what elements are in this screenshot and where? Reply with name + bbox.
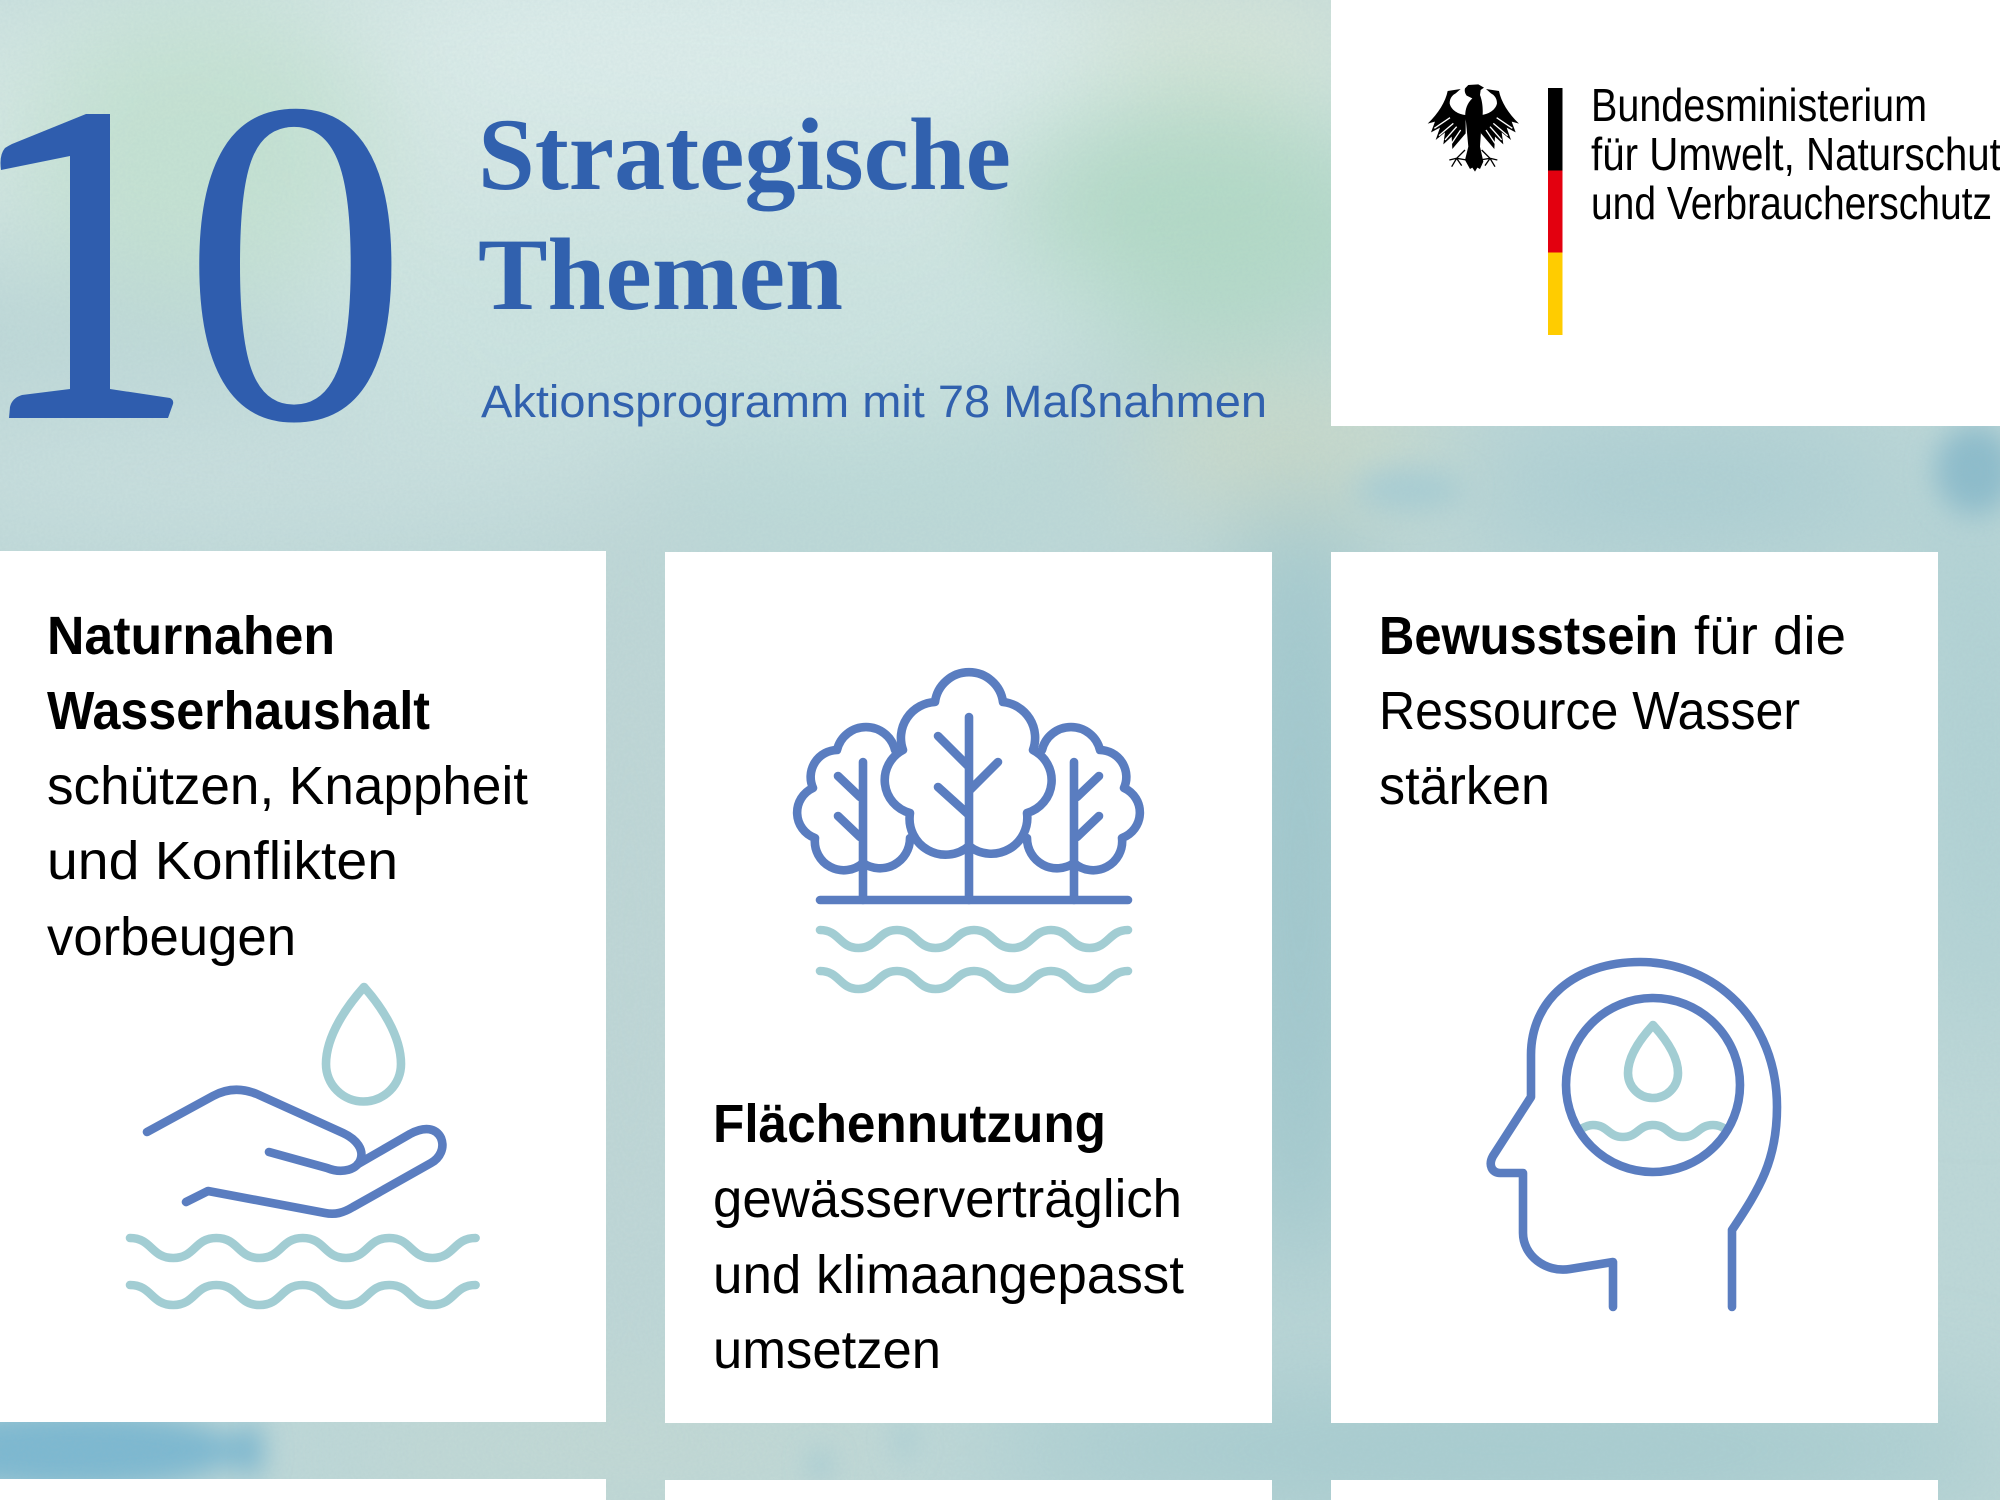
big number 10: 0 [182, 5, 409, 519]
card text: gewässerverträglich [713, 1169, 1182, 1229]
flag bar [1548, 88, 1562, 335]
panel: Bewusstsein [1331, 552, 1938, 1423]
card text: und Konflikten [47, 831, 398, 891]
ministry name: Bundesministerium [1591, 79, 1927, 131]
big number 10 [0, 108, 392, 422]
card text: für die [1694, 606, 1846, 666]
card text [713, 1094, 1184, 1380]
title: Strategische [478, 98, 1011, 212]
card text: Naturnahen [47, 606, 335, 666]
subtitle: Aktionsprogramm mit 78 Maßnahmen [481, 376, 1267, 427]
card text [1379, 606, 1846, 816]
panel: next row cards (cropped) [0, 1479, 1938, 1500]
card text: schützen, Knappheit [47, 756, 528, 816]
ministry name [1591, 79, 2000, 229]
card text: Flächennutzung [713, 1094, 1106, 1154]
card text: stärken [1379, 756, 1550, 816]
panel: Flächennutzung [665, 552, 1272, 1423]
card text: vorbeugen [47, 907, 296, 967]
panel: Naturnahen Wasserhaushalt [0, 551, 606, 1422]
title [478, 98, 1011, 332]
card text: Wasserhaushalt [47, 681, 430, 741]
title: Themen [478, 218, 843, 332]
icon: federal eagle [1428, 84, 1519, 172]
card text: und klimaangepasst [713, 1245, 1184, 1305]
card text: Ressource Wasser [1379, 681, 1800, 741]
panel: ministry logo [1331, 0, 2000, 426]
icon: trees with waves [797, 672, 1140, 989]
card text: Bewusstsein [1379, 606, 1678, 666]
icon: head with water drop [1491, 962, 1777, 1307]
card text [47, 606, 528, 967]
icon: hand with water drop and waves [130, 987, 476, 1305]
card text: umsetzen [713, 1320, 941, 1380]
